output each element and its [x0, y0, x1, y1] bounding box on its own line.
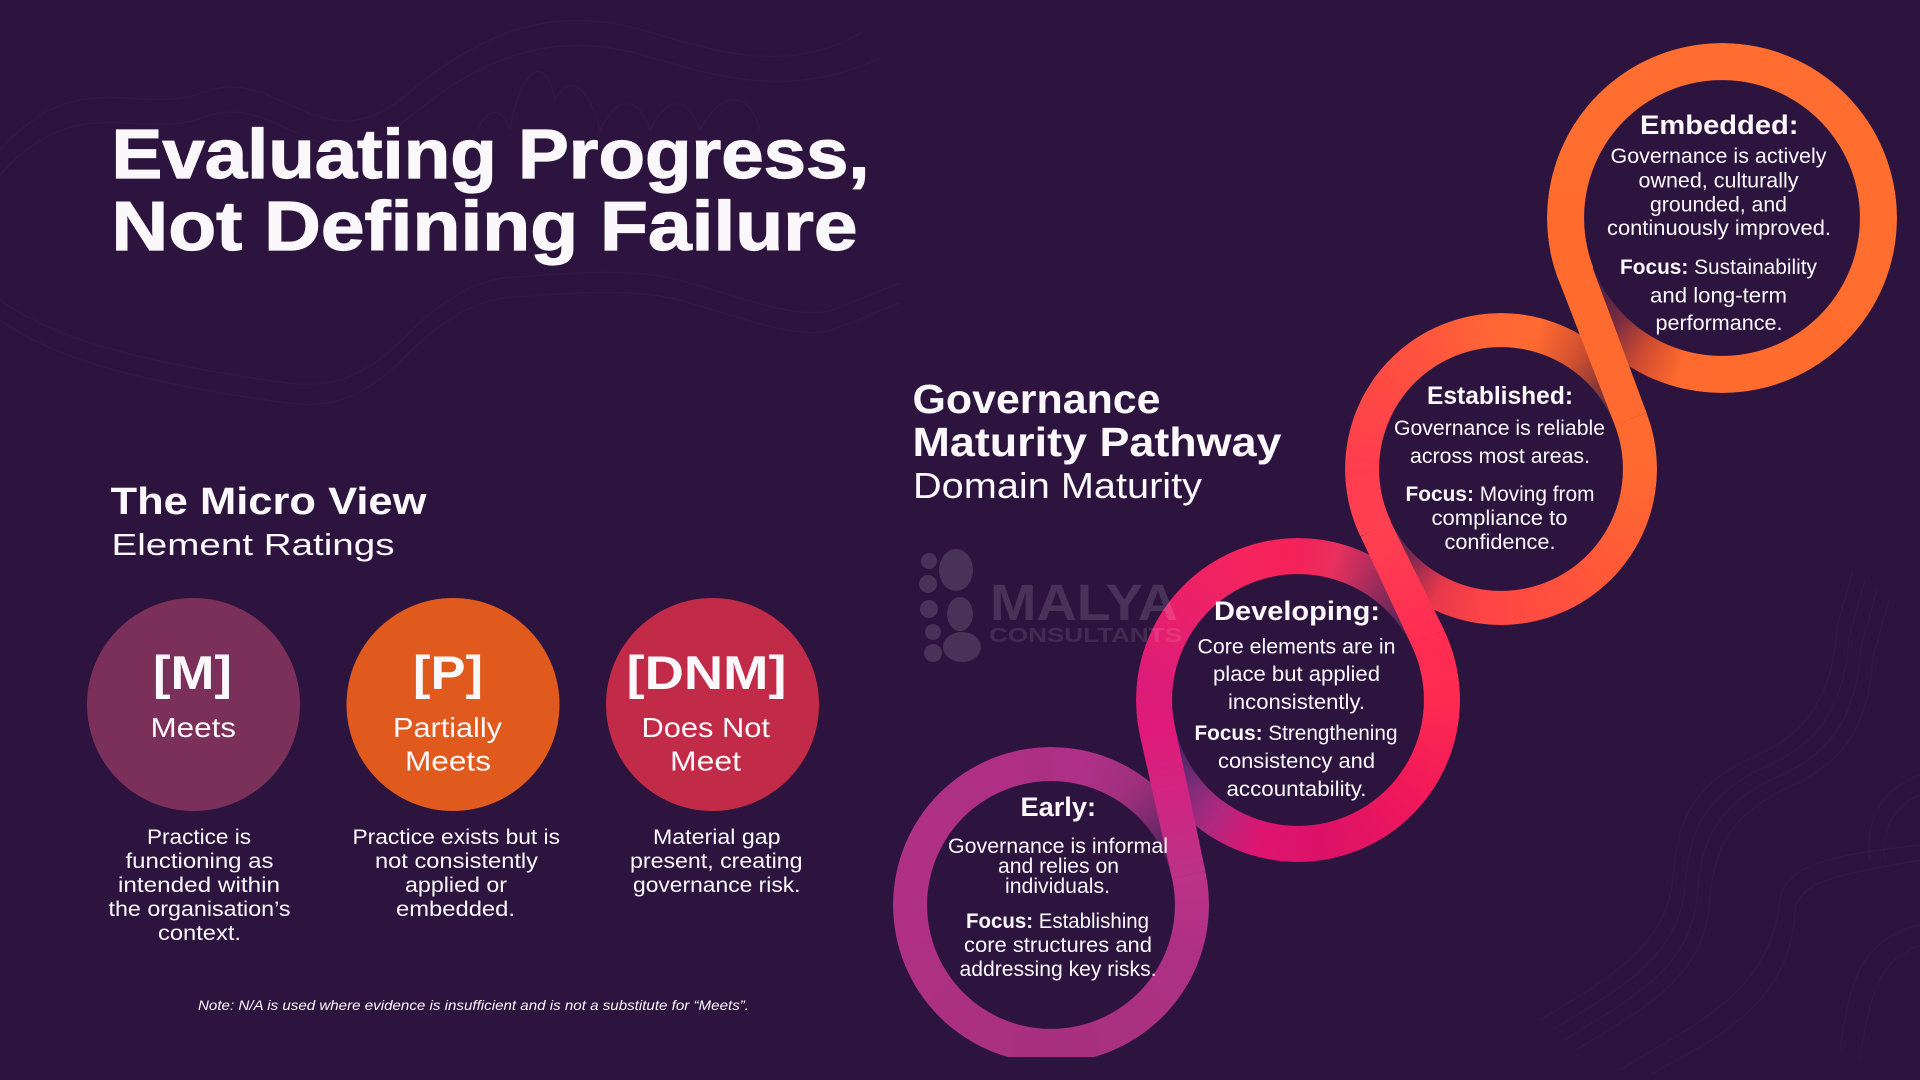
description: Does Not Meet: [630, 826, 802, 897]
text: Embedded: Focus: Sustainability: [1620, 256, 1817, 279]
description: Does Not Meet: governance risk.: [633, 874, 800, 897]
text: Established: confidence.: [1444, 531, 1556, 554]
heading: Governance Maturity Pathway: [912, 376, 1282, 506]
text: Developing: [1194, 596, 1398, 801]
text: Early: Early:: [1020, 792, 1096, 822]
description: Meets: functioning as: [126, 850, 274, 873]
rating: Does Not Meet: [DNM]: [626, 646, 786, 699]
connector: Developing to Established: [1361, 521, 1444, 646]
text: Embedded: Governance is actively: [1610, 145, 1827, 168]
title: Not Defining Failure: [112, 187, 858, 265]
text: Embedded: continuously improved.: [1607, 217, 1831, 240]
text: Established: across most areas.: [1410, 445, 1590, 468]
text: Established: Focus: Moving from: [1406, 483, 1594, 506]
rating: Does Not Meet: Does Not: [642, 712, 770, 743]
description: Partially Meets: applied or: [405, 874, 507, 897]
description: Does Not Meet: present, creating: [630, 850, 802, 873]
ring: Embedded: [1546, 43, 1896, 393]
text: Developing: inconsistently.: [1228, 691, 1365, 714]
text: Established: Established:: [1427, 382, 1573, 410]
text: Established: Governance is reliable: [1394, 417, 1605, 440]
rating: Does Not Meet: Meet: [670, 746, 741, 776]
text: Developing: Focus: Strengthening: [1194, 722, 1398, 745]
heading: Governance Maturity Pathway: Maturity Pathway: [912, 419, 1282, 465]
description: Partially Meets: not consistently: [375, 850, 539, 873]
text: Early: individuals.: [1005, 875, 1110, 898]
text: Embedded: owned, culturally: [1638, 170, 1799, 192]
text: Developing: accountability.: [1226, 778, 1366, 801]
connector: Established to Embedded: [1559, 267, 1646, 425]
heading: The Micro View: The Micro View: [110, 481, 427, 523]
ring: Established: [1345, 313, 1657, 625]
note: Note: N/A is used where evidence is insufficient and is not a substitute for “Meets”.: [198, 997, 749, 1013]
rating: Does Not Meet: [606, 598, 819, 811]
text: Developing: Core elements are in: [1198, 636, 1396, 658]
description: Meets: Practice is: [147, 826, 251, 849]
text: Embedded: and long-term: [1650, 284, 1787, 308]
title: [112, 115, 870, 265]
description: Meets: context.: [158, 922, 241, 945]
text: Early: [948, 792, 1168, 981]
text: Embedded: performance.: [1656, 312, 1782, 335]
description: Does Not Meet: Material gap: [653, 826, 780, 849]
logo watermark: MALYA: [990, 574, 1178, 631]
description: Partially Meets: embedded.: [396, 898, 515, 921]
text: Early: Governance is informal: [948, 835, 1168, 858]
rating: Meets: [M]: [153, 646, 232, 699]
text: Early: addressing key risks.: [960, 958, 1156, 981]
description: Partially Meets: [352, 826, 560, 921]
text: Developing: consistency and: [1218, 750, 1375, 773]
logo watermark: CONSULTANTS: [989, 625, 1182, 647]
rating: Partially Meets: [346, 598, 560, 811]
description: Meets: intended within: [118, 874, 280, 897]
heading: The Micro View: [110, 481, 427, 562]
text: Early: core structures and: [964, 934, 1152, 957]
ring: Developing: [1136, 538, 1460, 862]
heading: Governance Maturity Pathway: Governance: [912, 376, 1160, 422]
heading: Governance Maturity Pathway: Domain Maturity: [913, 465, 1202, 506]
description: Partially Meets: Practice exists but is: [352, 826, 560, 849]
title: Evaluating Progress,: [112, 115, 870, 193]
text: Embedded: grounded, and: [1650, 194, 1787, 216]
logo watermark: [919, 549, 1182, 662]
text: Established: compliance to: [1432, 507, 1568, 530]
text: Developing: place but applied: [1213, 663, 1380, 686]
text: Embedded: [1607, 110, 1831, 335]
description: Meets: [108, 826, 290, 945]
ring: Early: [893, 747, 1209, 1063]
rating: Partially Meets: [P]: [413, 646, 483, 699]
text: Embedded: Embedded:: [1640, 110, 1798, 140]
text: Early: and relies on: [998, 855, 1119, 878]
connector: Early to Developing: [1140, 727, 1205, 879]
rating: Partially Meets: Partially: [393, 712, 502, 743]
text: Early: Focus: Establishing: [966, 910, 1149, 933]
description: Meets: the organisation’s: [108, 898, 290, 921]
text: Developing: Developing:: [1214, 596, 1380, 626]
rating: Meets: Meets: [150, 712, 236, 743]
text: Established: [1394, 382, 1605, 554]
rating: Meets: [87, 598, 300, 811]
rating: Partially Meets: Meets: [405, 746, 491, 776]
heading: The Micro View: Element Ratings: [112, 527, 394, 562]
